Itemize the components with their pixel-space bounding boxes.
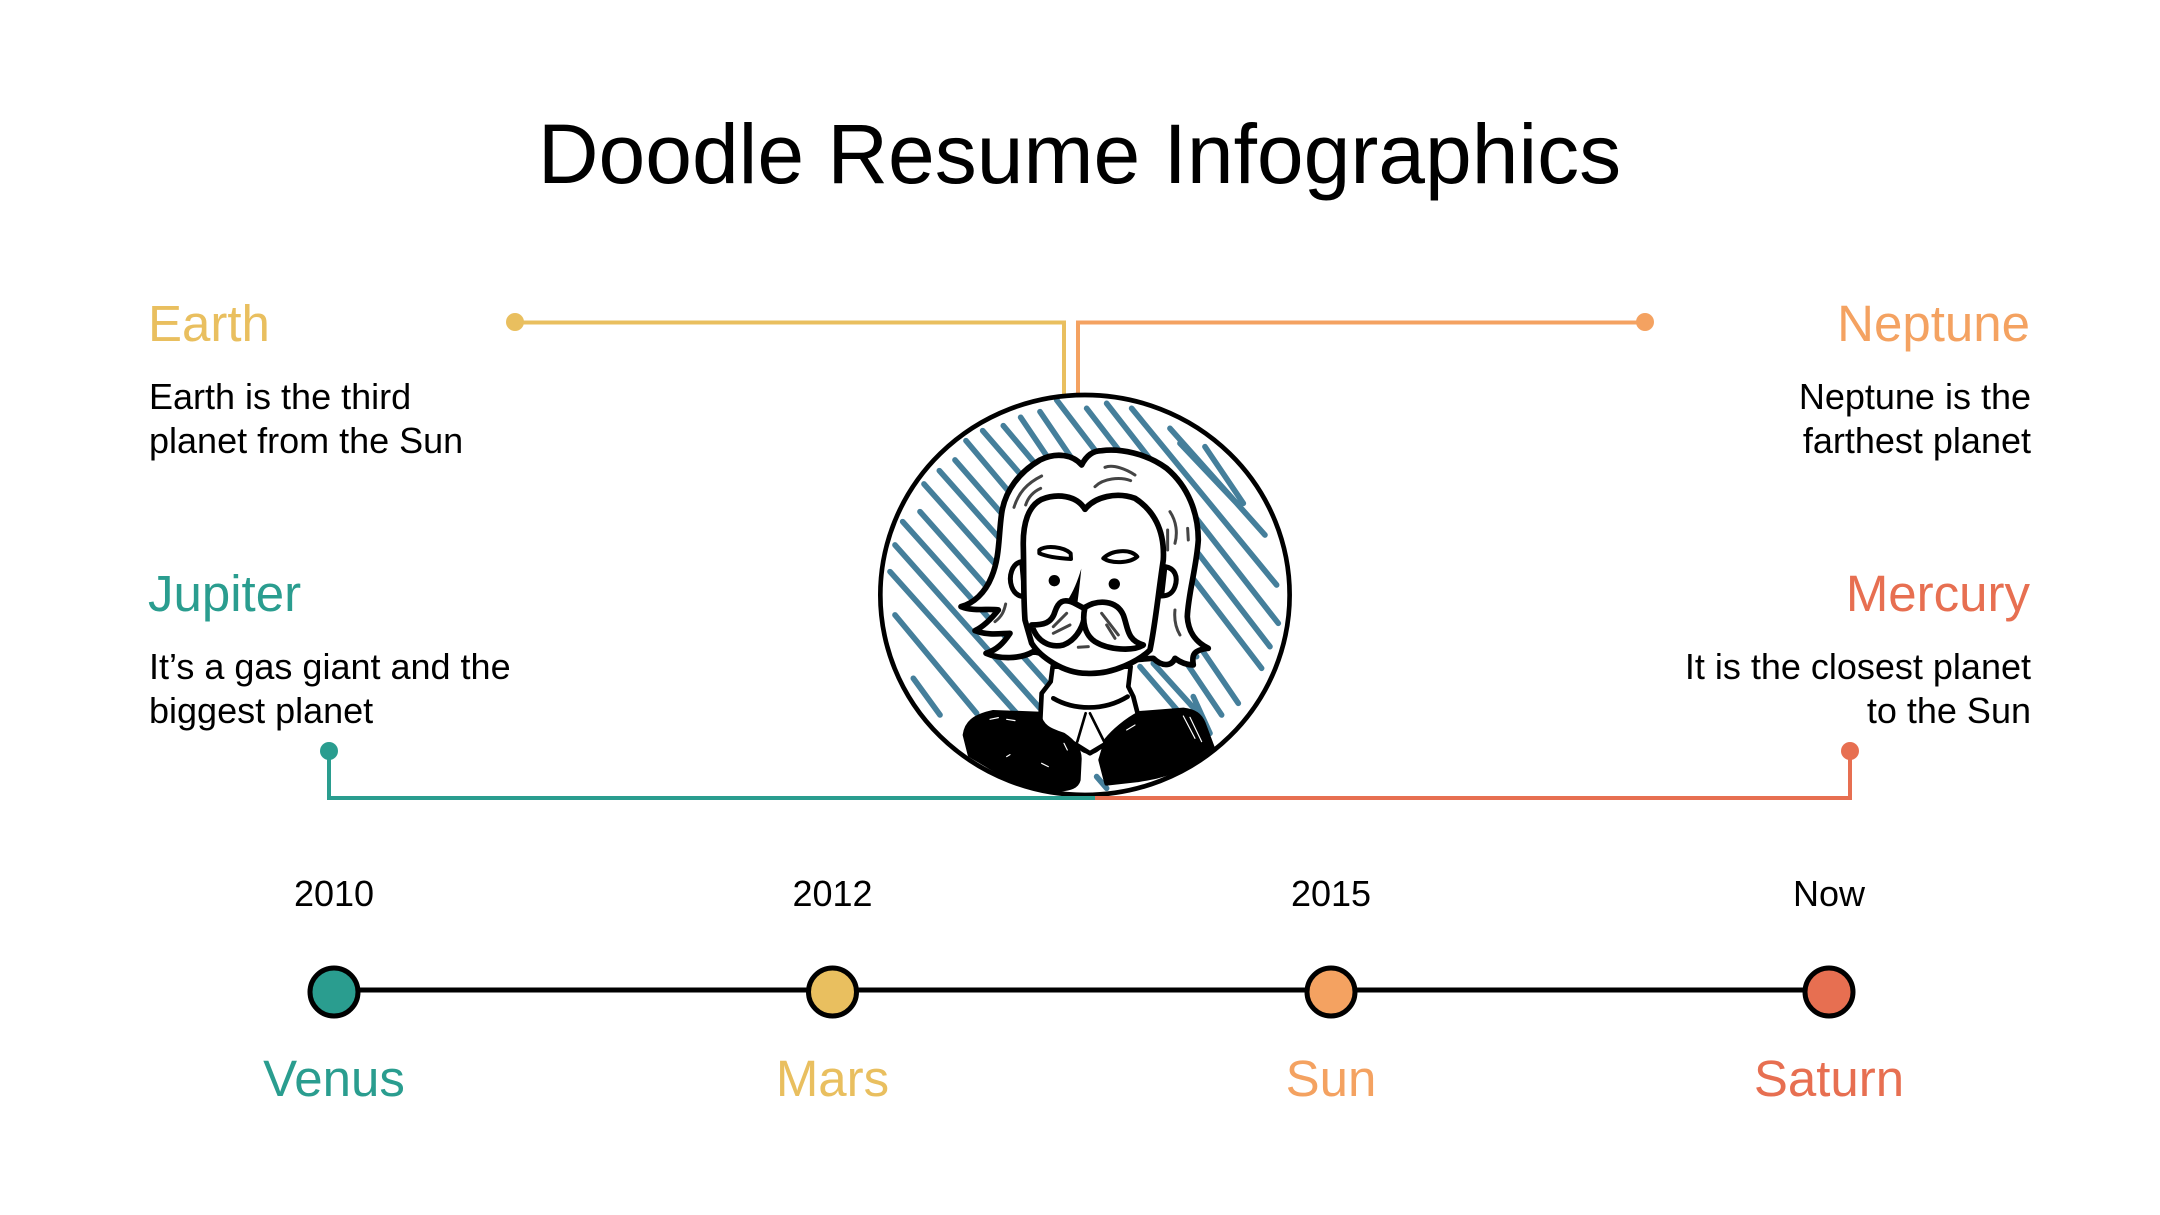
block: Mercury: It is the closest planet <box>1685 646 2031 687</box>
block: Jupiter: It’s a gas giant and the <box>149 646 511 687</box>
connector: Jupiter <box>320 742 1095 798</box>
milestone: 2015 Sun <box>1286 873 1376 1107</box>
connector: Earth <box>506 313 1064 398</box>
portrait circle <box>880 395 1290 795</box>
milestone: 2012 Mars: 2012 <box>792 873 873 914</box>
block: Neptune: Neptune <box>1837 295 2030 352</box>
block: Mercury <box>1685 565 2031 731</box>
jacket shoulders <box>965 710 1213 789</box>
block: Neptune: Neptune is the <box>1799 376 2031 417</box>
moustache <box>1032 601 1143 649</box>
hair details <box>995 466 1188 647</box>
block: Neptune <box>1799 295 2031 461</box>
timeline <box>263 873 1904 1107</box>
portrait outline <box>880 395 1290 795</box>
title: Doodle Resume Infographics <box>538 107 1621 201</box>
block: Jupiter: biggest planet <box>149 690 373 731</box>
block: Mercury: Mercury <box>1846 565 2030 622</box>
milestone: Now Saturn <box>1754 873 1904 1107</box>
block: Mercury: to the Sun <box>1867 690 2031 731</box>
face <box>1023 495 1163 673</box>
block: Earth: planet from the Sun <box>149 420 463 461</box>
milestone: 2010 Venus <box>263 873 405 1107</box>
block: Earth: Earth <box>148 295 270 352</box>
milestone: 2012 Mars <box>776 873 889 1107</box>
connector: Mercury <box>1095 742 1859 798</box>
nose <box>1067 569 1081 604</box>
milestone: 2010 Venus: 2010 <box>294 873 374 914</box>
block: Earth: Earth is the third <box>149 376 411 417</box>
milestone: 2012 Mars: Mars <box>776 1050 889 1107</box>
milestone: Now Saturn: Saturn <box>1754 1050 1904 1107</box>
ears <box>1010 562 1176 597</box>
blue hatching <box>890 400 1278 788</box>
connector: Neptune <box>1078 313 1654 398</box>
neck and collar <box>1040 667 1139 753</box>
block: Neptune: farthest planet <box>1803 420 2031 461</box>
block: Jupiter: Jupiter <box>148 565 301 622</box>
hair <box>961 450 1208 665</box>
portrait <box>880 395 1290 795</box>
milestone: Now Saturn: Now <box>1793 873 1866 914</box>
milestone: 2015 Sun: 2015 <box>1291 873 1371 914</box>
block: Jupiter <box>148 565 511 731</box>
milestone: 2015 Sun: Sun <box>1286 1050 1376 1107</box>
milestone: 2010 Venus: Venus <box>263 1050 405 1107</box>
eyebrows and eyes <box>1039 547 1137 590</box>
block: Earth <box>148 295 463 461</box>
